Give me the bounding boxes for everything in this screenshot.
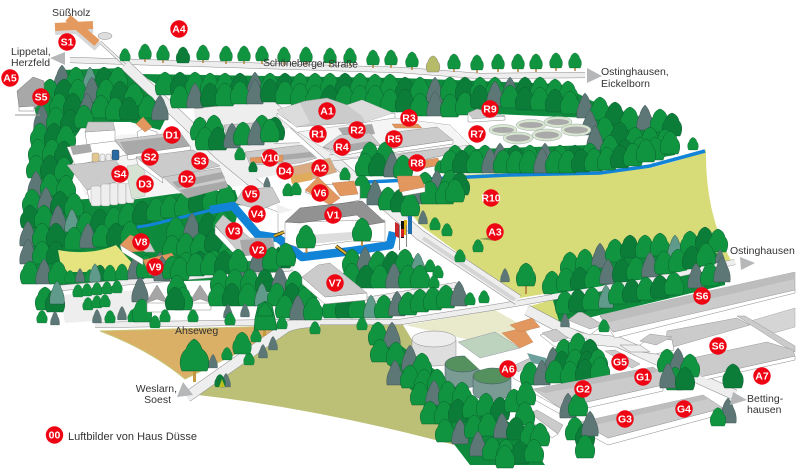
forest: below Ostinghausen road bbox=[555, 257, 730, 327]
marker R1: R1 bbox=[311, 128, 325, 140]
label: Weslarn, Soest: Soest bbox=[144, 394, 171, 406]
field: Ahseweg tan plot bbox=[100, 326, 284, 379]
marker R7: R7 bbox=[470, 128, 484, 140]
marker D3 bbox=[136, 175, 154, 193]
marker S1 bbox=[58, 33, 76, 51]
marker G5: G5 bbox=[613, 356, 627, 368]
marker G2 bbox=[574, 380, 592, 398]
label: Ostinghausen, Eickelborn: Eickelborn bbox=[601, 78, 650, 90]
marker A2: A2 bbox=[313, 162, 327, 174]
field: pale meadow bbox=[405, 310, 530, 345]
label: Schöneberger Straße: Schöneberger Straße bbox=[263, 57, 358, 71]
bridge: west deck bbox=[274, 232, 284, 236]
marker V1: V1 bbox=[327, 210, 340, 222]
marker S1: S1 bbox=[61, 36, 74, 48]
legend bbox=[46, 426, 197, 444]
sewage tanks R7 bbox=[489, 116, 591, 144]
label: Süßholz: Süßholz bbox=[52, 7, 91, 19]
orange roofs bbox=[502, 328, 533, 348]
bridge: west bbox=[274, 232, 284, 236]
marker A2 bbox=[311, 159, 329, 177]
marker D4 bbox=[276, 162, 294, 180]
marker R10: R10 bbox=[481, 192, 501, 204]
grey block bbox=[513, 360, 547, 382]
row of trees along Schöneberger Straße bbox=[120, 44, 581, 73]
marker V5: V5 bbox=[245, 188, 258, 200]
marker V3 bbox=[225, 222, 243, 240]
flags bbox=[395, 216, 412, 250]
building: V2 V3 bbox=[215, 215, 275, 262]
building: S5 grey barn bbox=[15, 77, 44, 115]
marker V10 bbox=[261, 149, 279, 167]
tan small shrub bbox=[240, 303, 250, 317]
silo: large tank bbox=[412, 340, 456, 366]
legend: Luftbilder von Haus Düsse bbox=[68, 431, 197, 443]
forest: central south bbox=[368, 322, 550, 468]
building: R1 R2 R4 R3 R5 block bbox=[298, 118, 470, 158]
marker V2 bbox=[249, 241, 267, 259]
marker S2 bbox=[141, 148, 159, 166]
building: S4 hall bbox=[67, 160, 130, 190]
marker S6 south bbox=[709, 337, 727, 355]
arrow: Bettinghausen bbox=[730, 392, 747, 405]
marker S5: S5 bbox=[35, 92, 48, 104]
shed: lower west bbox=[530, 410, 563, 438]
building: V1 manor bbox=[285, 201, 385, 248]
parking lot bbox=[60, 290, 142, 323]
label: Lippetal, Herzfeld: Lippetal, bbox=[11, 46, 51, 58]
tan yard bbox=[290, 172, 312, 184]
forest: south band bbox=[208, 247, 489, 320]
marker A3 bbox=[486, 223, 504, 241]
marker S5 bbox=[32, 88, 50, 106]
small orange house by creek bbox=[397, 176, 425, 196]
marker S6 north: S6 bbox=[696, 290, 709, 302]
roads bbox=[60, 42, 735, 397]
building: R9 bbox=[468, 109, 505, 122]
marker V9 bbox=[146, 258, 164, 276]
marker S4: S4 bbox=[114, 168, 127, 180]
arrow: Ostinghausen bbox=[740, 257, 755, 270]
label: Bettinghausen: hausen bbox=[747, 404, 782, 416]
marker A1: A1 bbox=[320, 106, 334, 118]
marker R2 bbox=[348, 121, 366, 139]
marker R9: R9 bbox=[483, 104, 497, 116]
marker R3: R3 bbox=[402, 112, 416, 124]
marker V2: V2 bbox=[252, 244, 265, 256]
shed: G5 bbox=[605, 350, 640, 368]
marker V6 bbox=[311, 184, 329, 202]
marker S2: S2 bbox=[144, 152, 157, 164]
marker V7: V7 bbox=[329, 278, 342, 290]
building: V8 V9 bbox=[120, 235, 177, 275]
houses with grey gables bbox=[146, 275, 212, 322]
marker V3: V3 bbox=[228, 226, 241, 238]
marker R3 bbox=[400, 109, 418, 127]
marker R8: R8 bbox=[410, 158, 424, 170]
shed: S6 north bbox=[600, 272, 795, 338]
road overlay to Bettinghausen bbox=[655, 360, 735, 395]
building: V10 bbox=[235, 145, 317, 187]
field: yellow meadow bbox=[411, 150, 732, 327]
marker A3: A3 bbox=[488, 226, 502, 238]
marker V9: V9 bbox=[149, 262, 162, 274]
building: S1 Süßholz cross farm bbox=[55, 18, 112, 47]
building: V7 bbox=[302, 263, 367, 304]
A3 aircraft icon bbox=[479, 237, 496, 241]
arrow: Weslarn, Soest bbox=[177, 382, 193, 397]
marker G3: G3 bbox=[618, 414, 632, 426]
marker R10 bbox=[481, 189, 501, 207]
building: V4 V5 bbox=[235, 187, 292, 235]
label: Bettinghausen: Betting- bbox=[747, 393, 784, 405]
forest: west belt bbox=[20, 65, 236, 235]
building: D2 hall bbox=[163, 168, 228, 198]
marker D4: D4 bbox=[278, 166, 292, 178]
forest: in front of V2 V9 bbox=[154, 243, 296, 281]
building: R8 bbox=[380, 147, 455, 173]
label: Weslarn, Soest: Weslarn, bbox=[136, 383, 177, 395]
marker R1 bbox=[309, 125, 327, 143]
west compound ground bbox=[70, 130, 245, 200]
shed: G3 G4 bbox=[580, 395, 723, 445]
marker G4: G4 bbox=[677, 404, 691, 416]
building: top white barn bbox=[85, 130, 115, 145]
shed: G1 G2 bbox=[533, 367, 667, 414]
marker R7 bbox=[468, 125, 486, 143]
field: olive meadow bbox=[198, 320, 480, 452]
marker A4 bbox=[170, 20, 188, 38]
label: Ostinghausen, Eickelborn: Ostinghausen, bbox=[601, 66, 669, 78]
forest: north belt bbox=[155, 72, 682, 162]
marker G3 bbox=[616, 410, 634, 428]
marker V4: V4 bbox=[251, 208, 264, 220]
tree: sapling at meadow bbox=[516, 263, 536, 294]
marker V10: V10 bbox=[261, 152, 279, 164]
silos: tall bbox=[91, 183, 134, 206]
shed: S6 south bbox=[620, 308, 795, 381]
parking trees bbox=[35, 277, 152, 325]
building: V6 bbox=[283, 167, 360, 205]
tree patches around east road bbox=[352, 142, 510, 282]
marker R5: R5 bbox=[387, 134, 401, 146]
building: low grey hall bbox=[67, 141, 127, 165]
forest: G5 left group bbox=[520, 333, 610, 385]
forest: south of west creek bbox=[20, 211, 238, 264]
arrow: Ostinghausen, Eickelborn bbox=[587, 68, 602, 83]
marker V8 bbox=[132, 233, 150, 251]
building: A1 halls bbox=[277, 98, 395, 133]
marker V8: V8 bbox=[135, 236, 148, 248]
marker A5: A5 bbox=[3, 72, 17, 84]
forest base shapes bbox=[28, 68, 725, 465]
small farm buildings bbox=[540, 331, 570, 347]
trees: V1 front bbox=[296, 218, 372, 253]
marker S3: S3 bbox=[194, 156, 207, 168]
marker A7: A7 bbox=[755, 370, 769, 382]
bridge: south deck bbox=[336, 246, 348, 255]
creek: west arm bbox=[78, 205, 232, 237]
forest island with hidden building bbox=[190, 115, 285, 150]
digester 1 bbox=[445, 364, 481, 388]
marker V4 bbox=[248, 205, 266, 223]
marker A6 bbox=[499, 360, 517, 378]
marker G1: G1 bbox=[636, 372, 650, 384]
silos: small bbox=[92, 153, 99, 162]
building cluster: west compound bbox=[67, 117, 228, 206]
building: S2 S3 hall bbox=[136, 150, 220, 178]
marker V5 bbox=[242, 185, 260, 203]
marker R5 bbox=[385, 130, 403, 148]
label: Ahseweg: Ahseweg bbox=[175, 325, 218, 337]
marker G2: G2 bbox=[576, 384, 590, 396]
marker D2: D2 bbox=[180, 174, 194, 186]
marker A7 bbox=[753, 367, 771, 385]
pale hall bbox=[458, 342, 520, 370]
bridge: south bbox=[336, 246, 348, 255]
moat bbox=[210, 206, 393, 257]
marker S3 bbox=[191, 152, 209, 170]
marker A5 bbox=[1, 69, 19, 87]
marker V1 bbox=[324, 206, 342, 224]
digester 2 bbox=[473, 376, 511, 400]
marker R9 bbox=[481, 100, 499, 118]
marker V6: V6 bbox=[314, 188, 327, 200]
biogas site bbox=[412, 311, 603, 400]
forest: Ostinghausen road bbox=[542, 227, 728, 294]
marker G4 bbox=[675, 400, 693, 418]
marker A6: A6 bbox=[501, 364, 515, 376]
marker A4: A4 bbox=[172, 24, 186, 36]
forest: along lower road bbox=[20, 245, 292, 284]
building: D4 A2 tan hall bbox=[287, 158, 337, 183]
building: D1 long hall bbox=[115, 132, 190, 155]
marker G1 bbox=[634, 368, 652, 386]
building: orange gable bbox=[137, 128, 157, 138]
marker S6 south: S6 bbox=[712, 340, 725, 352]
marker D1 bbox=[163, 126, 181, 144]
lawn bbox=[58, 245, 140, 272]
forest: shed clumps bbox=[560, 319, 743, 458]
marker D1: D1 bbox=[165, 130, 179, 142]
marker A1 bbox=[318, 102, 336, 120]
marker R4 bbox=[333, 138, 351, 156]
marker R8 bbox=[408, 154, 426, 172]
marker S4 bbox=[111, 165, 129, 183]
arrow: Lippetal, Herzfeld bbox=[50, 52, 65, 65]
creek: east arm bbox=[367, 151, 705, 182]
marker S6 north bbox=[693, 287, 711, 305]
marker D3: D3 bbox=[138, 178, 152, 190]
tree: lone by creek bbox=[688, 137, 698, 150]
marker D2 bbox=[178, 170, 196, 188]
label: Lippetal, Herzfeld: Herzfeld bbox=[11, 57, 50, 69]
marker R4: R4 bbox=[335, 142, 349, 154]
building: D3 tower bbox=[127, 164, 145, 199]
marker V7 bbox=[326, 274, 344, 292]
marker R2: R2 bbox=[350, 124, 364, 136]
moat edge bbox=[276, 244, 393, 263]
label: Ostinghausen: Ostinghausen bbox=[730, 245, 795, 257]
Ahseweg small trees and big trees bbox=[150, 301, 367, 387]
marker G5 bbox=[611, 353, 629, 371]
forest: east clearing south band bbox=[435, 139, 656, 173]
legend: 00 bbox=[49, 430, 60, 442]
